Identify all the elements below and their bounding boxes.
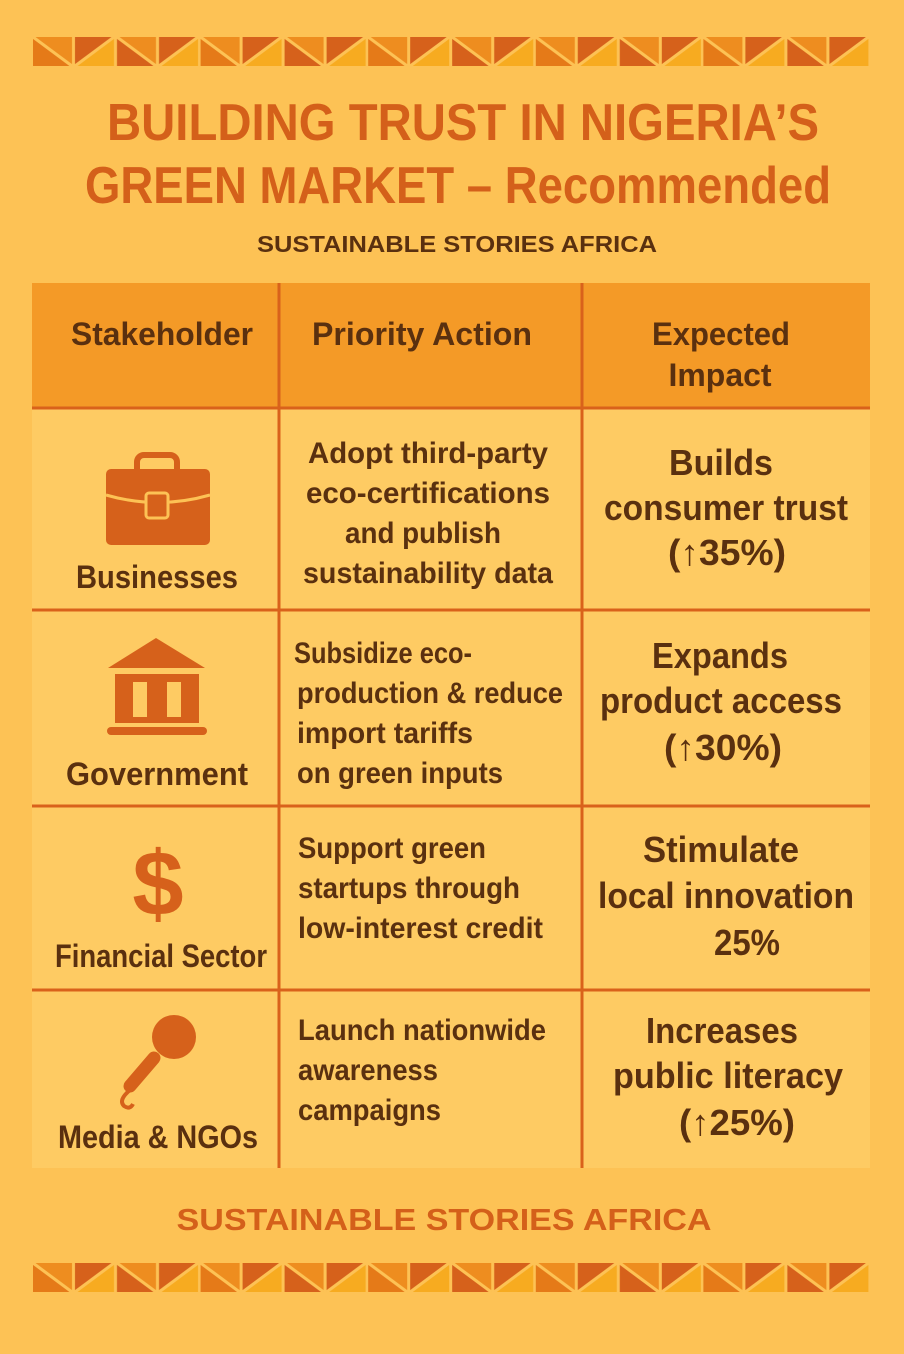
title — [85, 94, 831, 215]
bottom border band — [32, 1263, 870, 1294]
header row: Impact — [668, 357, 772, 393]
row: businesses: sustainability data — [303, 557, 553, 590]
row: financial sector: 25% — [714, 922, 780, 963]
row: financial sector: Stimulate — [643, 829, 799, 870]
row: government: on green inputs — [297, 757, 503, 790]
row: government: (↑30%) — [664, 727, 782, 768]
row: financial sector: low-interest credit — [298, 912, 543, 945]
row: businesses: Businesses — [76, 559, 238, 595]
top border band — [32, 37, 870, 66]
row: government: production & reduce — [297, 677, 563, 710]
row: financial sector: local innovation — [598, 875, 854, 916]
row: government: Expands — [652, 635, 788, 676]
row: businesses — [76, 437, 848, 595]
title: BUILDING TRUST IN NIGERIA’S — [107, 94, 819, 152]
icon: microphone — [122, 1015, 196, 1108]
row: businesses: (↑35%) — [668, 532, 786, 573]
row: media & NGOs: Launch nationwide — [298, 1014, 546, 1047]
row: government: product access — [600, 680, 842, 721]
row: businesses: and publish — [345, 517, 501, 550]
row: government: Subsidize eco- — [294, 637, 472, 670]
header row: Stakeholder — [71, 316, 253, 352]
row: media & NGOs: campaigns — [298, 1094, 441, 1127]
header row: Priority Action — [312, 316, 532, 352]
row: media & NGOs: awareness — [298, 1054, 438, 1087]
header row: Expected — [652, 316, 790, 352]
table — [32, 283, 870, 1168]
row: businesses: eco-certifications — [306, 477, 550, 510]
row: media & NGOs: public literacy — [613, 1055, 843, 1096]
row: media & NGOs: Increases — [646, 1010, 798, 1051]
row: media & NGOs — [58, 1010, 843, 1155]
row: financial sector — [55, 829, 854, 974]
row: financial sector: startups through — [298, 872, 520, 905]
row: government — [66, 635, 842, 792]
row: government: Government — [66, 756, 248, 792]
row: media & NGOs: Media & NGOs — [58, 1119, 258, 1155]
row: businesses: consumer trust — [604, 487, 848, 528]
header row — [71, 316, 790, 393]
row: businesses: Adopt third-party — [308, 437, 548, 470]
footer text: SUSTAINABLE STORIES AFRICA — [176, 1202, 712, 1237]
row: financial sector: Financial Sector — [55, 938, 267, 974]
icon: government building — [107, 638, 207, 735]
row: businesses: Builds — [669, 442, 773, 483]
icon: dollar sign: $ — [132, 833, 184, 935]
row: media & NGOs: (↑25%) — [679, 1102, 795, 1143]
row: government: import tariffs — [297, 717, 473, 750]
row: financial sector: Support green — [298, 832, 486, 865]
icon: briefcase — [106, 455, 210, 545]
subtitle: SUSTAINABLE STORIES AFRICA — [257, 231, 657, 257]
